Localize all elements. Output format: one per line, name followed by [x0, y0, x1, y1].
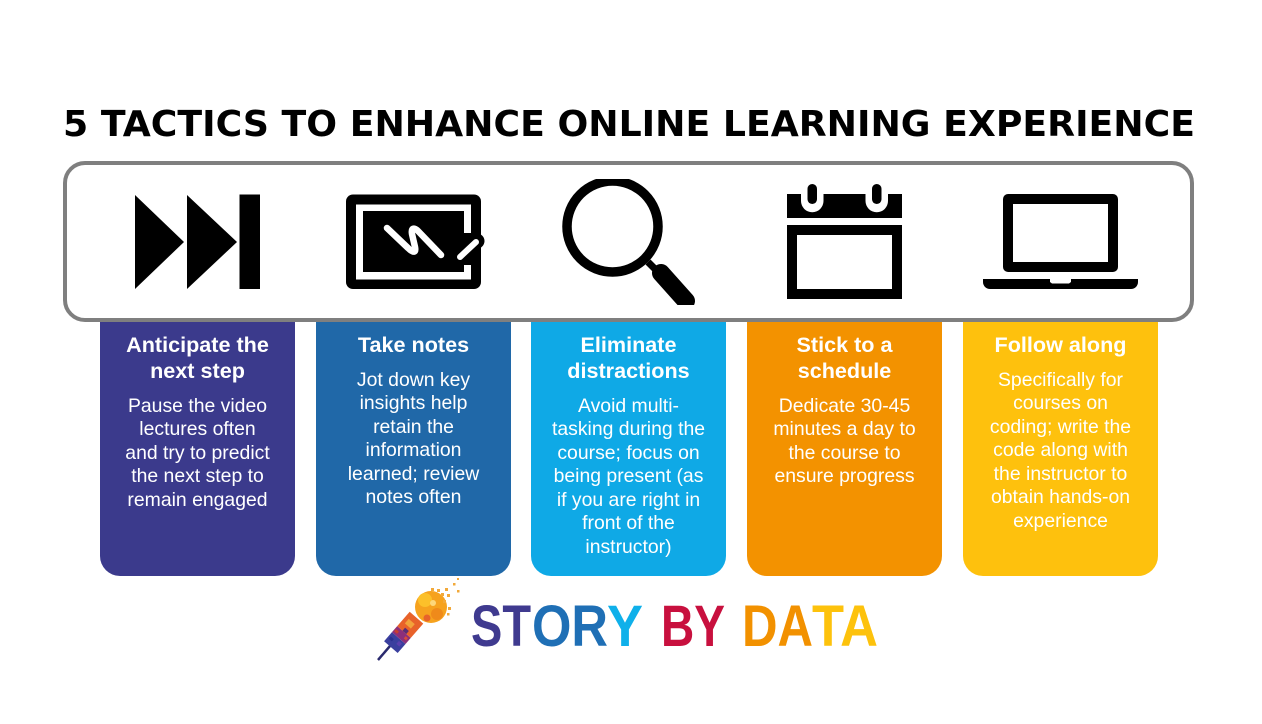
body text: take notes: insights help [360, 392, 467, 414]
body text: anticipate: Pause the video [128, 394, 267, 416]
body text: follow along: Specifically for [998, 368, 1123, 390]
logo wordmark [471, 594, 878, 659]
heading: take notes: Take notes [358, 332, 469, 357]
icon: laptop [983, 194, 1138, 289]
logo wordmark: DA [742, 594, 813, 659]
body text: eliminate distractions: course; focus on [557, 442, 700, 464]
card 2: take notes [316, 300, 511, 576]
body text: eliminate distractions: front of the [582, 512, 675, 534]
icon panel [65, 163, 1192, 320]
body text: eliminate distractions: if you are right in [557, 488, 700, 510]
heading: eliminate distractions: Eliminate [580, 332, 676, 357]
body text: follow along: courses on [1013, 392, 1108, 414]
body text: stick to a schedule: ensure progress [774, 465, 915, 487]
card 3: eliminate distractions [531, 300, 726, 576]
heading: stick to a schedule: Stick to a [796, 332, 892, 357]
body text: eliminate distractions: instructor) [585, 536, 672, 558]
card 4: stick to a schedule [747, 300, 942, 576]
body text: follow along: the instructor to [994, 462, 1127, 484]
body text: follow along [990, 368, 1131, 532]
body text: follow along: code along with [993, 439, 1128, 461]
icon: notes tablet [346, 194, 481, 289]
body text: stick to a schedule: Dedicate 30-45 [779, 394, 910, 416]
body text: take notes: Jot down key [357, 368, 470, 390]
body text: anticipate: and try to predict [125, 442, 270, 464]
body text: stick to a schedule: the course to [788, 442, 901, 464]
heading: eliminate distractions: distractions [567, 358, 690, 383]
body text: anticipate: lectures often [139, 418, 256, 440]
logo mark: pixel microphone [378, 578, 460, 660]
body text: take notes: information [366, 439, 461, 461]
logo wordmark: ST [471, 594, 531, 659]
logo wordmark: OR [532, 594, 608, 659]
logo wordmark: Y [607, 594, 643, 659]
body text: anticipate [125, 394, 270, 510]
body text: take notes: retain the [373, 416, 454, 438]
card 5: follow along [963, 300, 1158, 576]
body text: eliminate distractions [552, 394, 705, 558]
body text: stick to a schedule [773, 394, 916, 487]
icon: fast forward [135, 194, 260, 289]
body text: eliminate distractions: Avoid multi- [578, 394, 679, 416]
body text: take notes: notes often [366, 486, 461, 508]
body text: take notes: learned; review [348, 462, 479, 484]
logo wordmark: BY [661, 594, 725, 659]
body text: eliminate distractions: being present (as [554, 465, 703, 487]
heading: stick to a schedule: schedule [798, 358, 891, 383]
body text: anticipate: the next step to [131, 465, 264, 487]
icon: calendar [787, 184, 902, 299]
heading: anticipate the next step: Anticipate the [126, 332, 269, 357]
heading: eliminate distractions [567, 332, 690, 383]
heading: anticipate the next step: next step [150, 358, 245, 383]
body text: take notes [348, 368, 480, 508]
body text: follow along: obtain hands-on [991, 486, 1130, 508]
logo wordmark: TA [812, 594, 878, 659]
body text: eliminate distractions: tasking during the [552, 418, 705, 440]
body text: follow along: coding; write the [990, 416, 1131, 438]
logo: story by data [378, 578, 878, 660]
title: 5 TACTICS TO ENHANCE ONLINE LEARNING EXPERIENCE [63, 104, 1195, 145]
icon: magnifying glass [567, 181, 686, 301]
body text: follow along: experience [1013, 510, 1108, 532]
heading: anticipate the next step [126, 332, 269, 383]
body text: stick to a schedule: minutes a day to [773, 418, 916, 440]
body text: anticipate: remain engaged [127, 488, 268, 510]
heading: stick to a schedule [796, 332, 893, 383]
card 1: anticipate the next step [100, 300, 295, 576]
heading: follow along: Follow along [995, 332, 1126, 357]
